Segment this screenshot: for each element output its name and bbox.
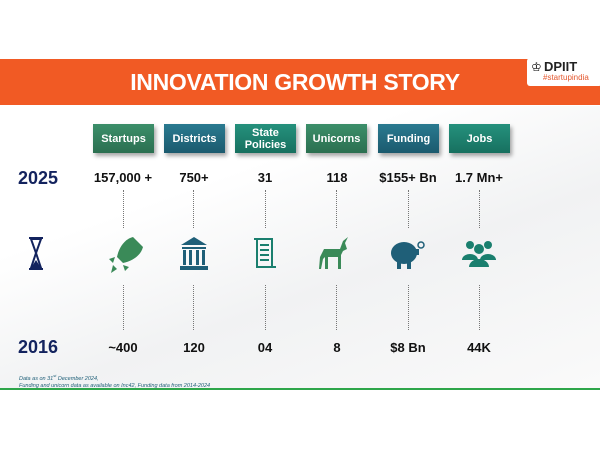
values 2025: 118: [326, 170, 347, 185]
values 2025: 750+: [179, 170, 209, 185]
buttons: Districts: [172, 132, 217, 144]
icon: people: [462, 241, 496, 267]
footnote: [19, 373, 210, 389]
icons: [29, 237, 496, 273]
logo: #startupindia: [543, 73, 589, 82]
values 2025: 157,000 +: [94, 170, 152, 185]
buttons: State: [252, 126, 279, 138]
icon: piggy bank: [391, 242, 424, 269]
background dots: [0, 106, 600, 388]
icon: rocket: [109, 237, 143, 273]
logo: DPIIT: [544, 59, 577, 74]
buttons: Jobs: [467, 132, 492, 144]
year 2025: 2025: [18, 168, 58, 188]
buttons: Unicorns: [313, 132, 360, 144]
values 2016: ~400: [108, 340, 138, 355]
values 2025: $155+ Bn: [379, 170, 437, 185]
values 2025: [94, 170, 503, 185]
values 2016: $8 Bn: [390, 340, 426, 355]
green line: [0, 388, 600, 390]
dotted lines: [123, 190, 480, 330]
values 2016: 04: [258, 340, 272, 355]
year 2016: 2016: [18, 337, 58, 357]
buttons: [92, 124, 514, 158]
title banner: INNOVATION GROWTH STORY: [130, 69, 460, 95]
logo: ♔: [531, 60, 542, 74]
values 2025: 31: [258, 170, 272, 185]
icon: bank: [180, 237, 208, 270]
icon: hourglass: [29, 237, 43, 270]
values 2025: 1.7 Mn+: [455, 170, 503, 185]
buttons: Policies: [245, 138, 286, 150]
footnote: Data as on 31st December 2024,: [19, 373, 99, 382]
icon: unicorn: [319, 237, 348, 269]
title banner: [0, 59, 600, 105]
footnote: Funding and unicorn data as available on Inc42, Funding data from 2014-2024: [19, 383, 210, 389]
values 2016: 44K: [467, 340, 491, 355]
logo: [527, 58, 600, 86]
values 2016: 8: [333, 340, 341, 355]
values 2016: [108, 340, 491, 355]
icon: scroll: [254, 239, 276, 267]
buttons: Funding: [387, 132, 430, 144]
values 2016: 120: [183, 340, 205, 355]
buttons: Startups: [101, 132, 146, 144]
